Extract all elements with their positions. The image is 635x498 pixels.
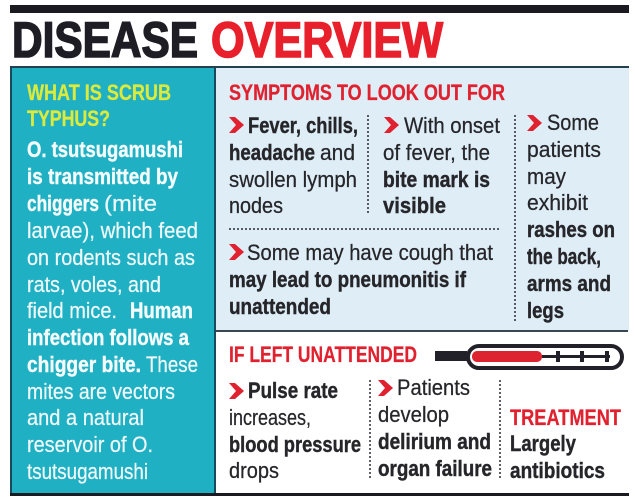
heading: what is scrub typhus: TYPHUS?	[27, 106, 110, 131]
symptom: bite mark: bite mark is	[383, 167, 490, 192]
text block: description: (mite	[104, 191, 157, 216]
heading: what is scrub typhus: WHAT IS SCRUB	[27, 80, 171, 105]
title: DISEASE	[12, 12, 198, 68]
effect: delirium: Patients	[397, 375, 470, 400]
top bar	[10, 5, 629, 13]
symptom: bite mark: visible	[383, 193, 446, 218]
symptom: fever: nodes	[229, 193, 283, 218]
symptom: bite mark: of fever, the	[383, 140, 490, 165]
icon: thermometer	[435, 346, 622, 368]
text block: description: chiggers	[27, 191, 99, 216]
symptom: bite mark	[383, 113, 500, 218]
text block: description: on rodents such as	[27, 245, 195, 270]
treatment: Largely	[510, 431, 577, 456]
symptom: fever: and	[320, 140, 355, 165]
text block: description: reservoir of O.	[27, 432, 153, 457]
effect: delirium: organ failure	[378, 456, 492, 481]
text block: description: mites are vectors	[27, 379, 175, 404]
effect: pulse rate: drops	[229, 458, 279, 483]
text block: description: These	[146, 352, 198, 377]
heading: symptoms to look out for: SYMPTOMS TO LOOK OUT FOR	[229, 80, 505, 105]
symptom: rashes: patients	[527, 137, 601, 162]
effect: delirium: delirium and	[378, 429, 491, 454]
text block: description: rats, voles, and	[27, 272, 161, 297]
text block: description: O. tsutsugamushi	[27, 137, 183, 162]
heading: if left unattended: IF LEFT UNATTENDED	[229, 342, 417, 367]
symptom: rashes: exhibit	[527, 190, 588, 215]
text block: description: is transmitted by	[27, 164, 179, 189]
symptom: rashes: arms and	[527, 271, 611, 296]
text block: description: field mice.	[27, 298, 117, 323]
text block: description: tsutsugamushi	[27, 459, 148, 484]
symptom: rashes: the back,	[527, 244, 601, 269]
bottom rule	[10, 493, 629, 496]
text block: description	[27, 137, 198, 484]
symptom: cough: may lead to pneumonitis if	[229, 267, 467, 292]
effect: pulse rate: increases,	[229, 405, 311, 430]
heading: what is scrub typhus	[27, 80, 171, 131]
text block: description: infection follows a	[27, 325, 190, 350]
symptom: fever	[229, 113, 358, 218]
effect: pulse rate: blood pressure	[229, 432, 361, 457]
text block: description: chigger bite.	[27, 352, 141, 377]
panel: if left unattended	[229, 342, 622, 483]
symptom: rashes: legs	[527, 298, 564, 323]
symptom: fever: swollen lymph	[229, 167, 357, 192]
text block: description: and a natural	[27, 405, 144, 430]
symptom: cough: Some may have cough that	[247, 240, 493, 265]
effect: pulse rate: Pulse rate	[248, 378, 338, 403]
treatment	[510, 405, 621, 483]
title: OVERVIEW	[211, 12, 444, 68]
panel: symptoms	[216, 68, 629, 332]
title	[12, 12, 444, 68]
symptom: rashes: Some	[547, 110, 599, 135]
symptom: cough	[229, 240, 493, 319]
effect: pulse rate	[229, 378, 361, 483]
symptom: bite mark: With onset	[404, 113, 500, 138]
text block: description: Human	[130, 298, 193, 323]
symptom: rashes	[527, 110, 615, 323]
symptom: rashes: rashes on	[527, 217, 615, 242]
symptom: fever: headache	[229, 140, 315, 165]
text block: description: larvae), which feed	[27, 218, 198, 243]
effect: delirium: develop	[378, 402, 449, 427]
treatment: antibiotics	[510, 458, 605, 483]
symptom: fever: Fever, chills,	[248, 113, 358, 138]
symptom: cough: unattended	[229, 294, 331, 319]
symptom: rashes: may	[527, 164, 566, 189]
effect: delirium	[378, 375, 492, 481]
